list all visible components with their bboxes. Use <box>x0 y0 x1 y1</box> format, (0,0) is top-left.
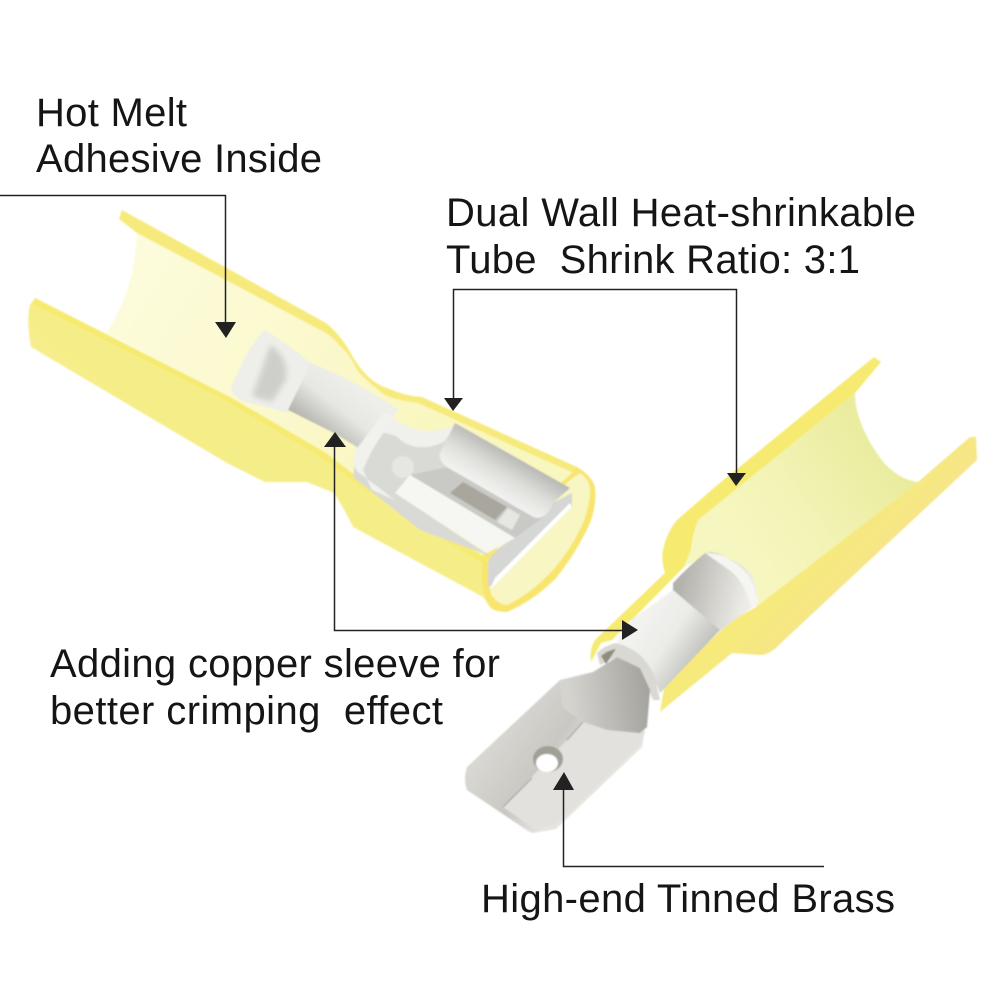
right blade slit <box>503 722 583 807</box>
callout: hot melt adhesive: Hot Melt <box>36 91 187 135</box>
arrow: adhesive <box>0 196 236 338</box>
callout: dual wall tube <box>444 191 916 486</box>
callout: tinned brass: High-end Tinned Brass <box>481 877 895 921</box>
right blade funnel <box>560 657 650 733</box>
callout: dual wall tube: Tube Shrink Ratio: 3:1 <box>446 238 860 282</box>
right tube interior <box>684 393 918 607</box>
right connector: male terminal in yellow tube <box>465 357 977 833</box>
left tube end ring <box>482 467 595 612</box>
left tube lower shell <box>28 298 490 607</box>
callout: copper sleeve: Adding copper sleeve for <box>50 642 500 686</box>
right blade lighter half <box>503 722 645 828</box>
left curved band <box>382 417 456 447</box>
arrows: sleeve <box>324 432 638 640</box>
right sleeve mouth <box>597 643 660 700</box>
left tube end inner <box>488 473 590 605</box>
left receptacle channel <box>410 467 572 587</box>
callout: hot melt adhesive <box>0 91 322 338</box>
left lower roll <box>395 475 515 553</box>
left connector: female terminal in yellow tube <box>28 210 595 612</box>
right tube lower shell <box>660 437 977 712</box>
left crimp collar <box>353 412 396 500</box>
right metal barrel <box>673 552 758 632</box>
left dimple <box>392 456 414 478</box>
left tube front lip <box>32 298 488 566</box>
arrows: tube <box>444 290 746 486</box>
left tube interior <box>106 214 586 603</box>
callout: dual wall tube: Dual Wall Heat-shrinkable <box>446 191 916 235</box>
left open end <box>488 493 572 587</box>
left metal crimp barrel <box>231 330 311 413</box>
left upper roll <box>440 423 570 518</box>
right blade hole <box>533 746 563 772</box>
right blade <box>465 680 645 833</box>
left tube upper rim <box>119 210 584 476</box>
callout: tinned brass <box>481 772 895 921</box>
callout: hot melt adhesive: Adhesive Inside <box>36 137 322 181</box>
callout: copper sleeve <box>50 432 638 733</box>
callout: copper sleeve: better crimping effect <box>50 689 443 733</box>
left copper sleeve <box>288 363 399 447</box>
right tube upper rim <box>590 357 881 662</box>
left neck <box>353 418 490 556</box>
right copper sleeve <box>617 590 720 693</box>
arrow: brass <box>553 772 824 866</box>
